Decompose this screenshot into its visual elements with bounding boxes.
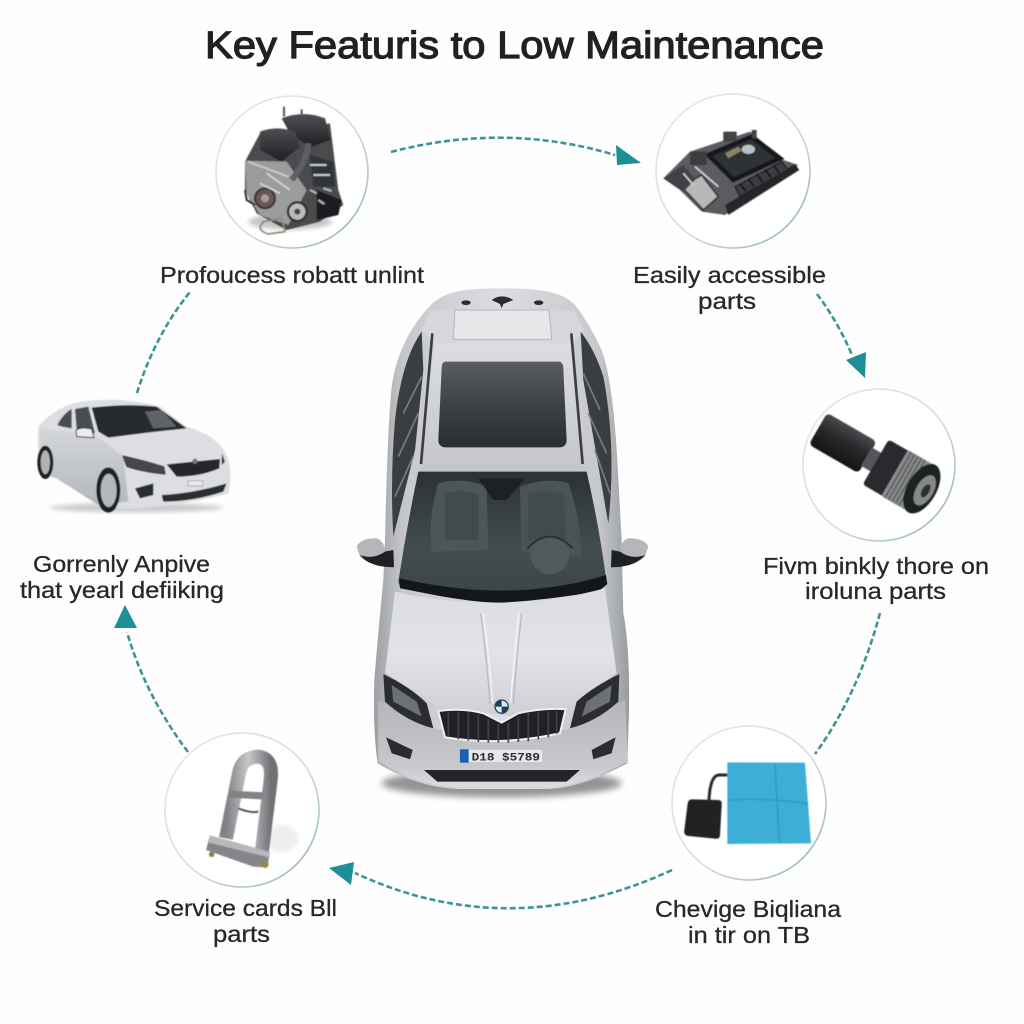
roof — [418, 343, 587, 472]
feature: cloth and pack circle — [672, 726, 826, 880]
label: service cards — [154, 895, 337, 947]
label: robust unit: Profoucess robatt unlint — [160, 262, 425, 288]
feature: lock clamp circle — [165, 733, 319, 887]
label: easily accessible parts — [633, 262, 826, 314]
icon: blue cloth with pack — [684, 762, 811, 844]
windshield — [398, 472, 607, 602]
grille — [167, 459, 220, 477]
rear wheel — [37, 446, 53, 479]
icon: metal clamp — [206, 757, 298, 868]
right side window — [581, 332, 612, 523]
side mirror right — [612, 538, 648, 567]
label: side car: Gorrenly Anpive — [33, 551, 210, 577]
headlight — [123, 456, 165, 474]
headlight right — [570, 674, 619, 728]
fog lamp left — [386, 737, 413, 759]
title: Key Featuris to Low Maintenance — [205, 25, 824, 67]
label: side car — [20, 551, 224, 603]
roof rails — [421, 333, 583, 464]
hood creases — [481, 613, 522, 703]
label: connector parts — [763, 553, 989, 604]
car body — [38, 400, 230, 509]
sensors — [461, 296, 543, 308]
roof front panel — [422, 311, 584, 343]
side windows — [57, 407, 95, 433]
license plate: D18 $5789 — [472, 752, 540, 764]
arrow: connector to cloth — [815, 613, 880, 754]
arrow: side car to engine — [137, 292, 190, 393]
label: service cards: Service cards Bll — [154, 895, 337, 921]
label: cloth — [655, 896, 841, 948]
license plate — [460, 749, 543, 764]
fog lamp right — [592, 737, 616, 759]
hood — [385, 588, 617, 717]
feature: accessible parts circle — [656, 94, 810, 248]
label: connector parts: iroluna parts — [805, 578, 946, 604]
seats — [431, 481, 488, 552]
front bumper — [378, 700, 628, 787]
arrow: cloth to lock — [329, 862, 672, 908]
car shadow — [382, 769, 622, 797]
wiper band — [399, 575, 607, 603]
side mirror — [76, 428, 94, 438]
grille — [438, 709, 566, 741]
side mirror left — [357, 538, 393, 567]
lower air vent — [424, 770, 580, 782]
badge — [494, 699, 509, 714]
steering wheel — [531, 536, 569, 574]
label: easily accessible parts: parts — [698, 288, 756, 314]
icon: engine module — [663, 130, 799, 215]
feature: connector circle — [803, 389, 955, 541]
label: cloth: Chevige Biqliana — [655, 896, 841, 922]
feature: engine circle — [216, 96, 368, 248]
arrow: lock to side car — [114, 605, 188, 752]
body side panel — [40, 428, 128, 505]
icon: connector part — [804, 405, 948, 520]
feature: side view car — [37, 400, 230, 513]
label: easily accessible parts: Easily accessible — [633, 262, 826, 288]
arrow: engine to accessible parts — [391, 138, 641, 165]
headlight left — [383, 674, 433, 728]
car body — [374, 288, 629, 789]
left side window — [392, 332, 423, 537]
icon: engine — [245, 107, 343, 234]
label: cloth: in tir on TB — [688, 922, 810, 948]
sunroof — [438, 362, 567, 447]
central car top view — [357, 288, 648, 797]
front wheel — [96, 467, 120, 513]
label: service cards: parts — [213, 921, 270, 947]
label: connector parts: Fivm binkly thore on — [763, 553, 989, 579]
lower bumper — [135, 483, 227, 502]
windshield — [92, 405, 187, 438]
label: side car: that yearl defiiking — [20, 577, 224, 603]
arrow: accessible parts to connector — [817, 294, 866, 378]
